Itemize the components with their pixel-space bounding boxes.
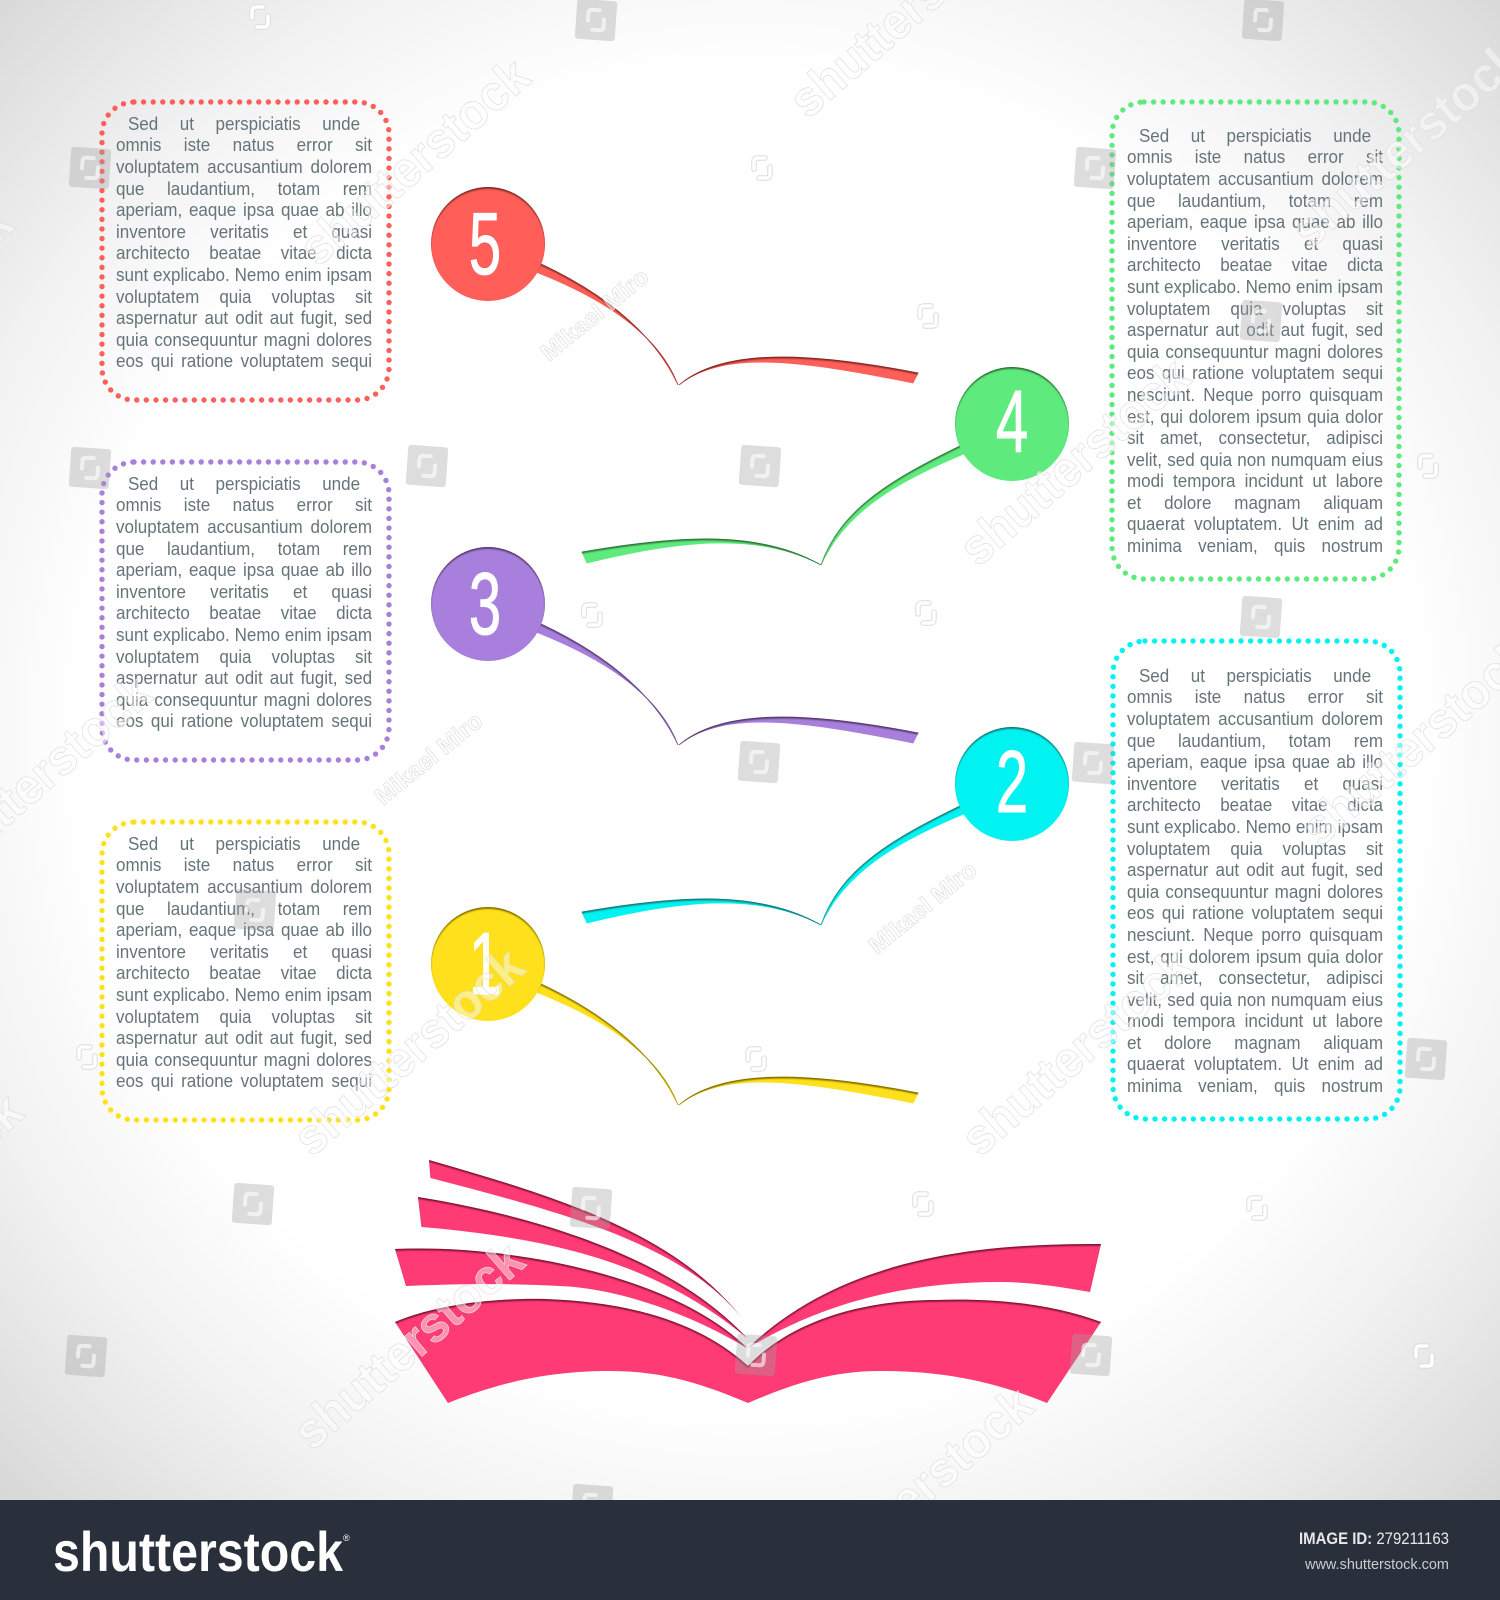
watermark overlay: Mikael Miro <box>864 856 982 960</box>
panel 4: green text box: Sed ut perspiciatis unde <box>1139 125 1371 146</box>
panel 4: green text box: velit, sed quia non numquam eius <box>1127 449 1383 470</box>
panel 2: cyan text box: eos qui ratione voluptatem sequi <box>1127 902 1383 923</box>
panel 4: green text box: que laudantium, totam rem <box>1127 190 1383 211</box>
panel 2: cyan text box: modi tempora incidunt ut labore <box>1127 1010 1383 1031</box>
panel 1: yellow text box <box>99 819 392 1123</box>
arrow: connector from badge 4 <box>582 445 966 565</box>
panel 4: green text box: sunt explicabo. Nemo enim ipsam <box>1127 276 1383 297</box>
panel 3: purple text box: inventore veritatis et quasi <box>116 581 372 602</box>
panel 5: red text box: voluptatem accusantium dolorem <box>116 156 372 177</box>
badge 3: 3 <box>469 555 501 653</box>
panel 3: purple text box: aperiam, eaque ipsa quae ab illo <box>116 559 372 580</box>
watermark overlay: Mikael Miro <box>370 707 488 811</box>
footer url: www.shutterstock.com <box>1304 1556 1449 1573</box>
panel 2: cyan text box: aperiam, eaque ipsa quae ab illo <box>1127 751 1383 772</box>
panel 4: green text box: inventore veritatis et quasi <box>1127 233 1383 254</box>
panel 5: red text box: voluptatem quia voluptas sit <box>116 286 372 307</box>
panel 3: purple text box <box>99 459 392 763</box>
panel 5: red text box: architecto beatae vitae dicta <box>116 242 372 263</box>
icon: open book <box>395 1160 1101 1403</box>
watermark overlay: Mikael Miro <box>536 263 654 367</box>
panel 4: green text box: voluptatem quia voluptas sit <box>1127 298 1383 319</box>
panel 3: purple text box: voluptatem accusantium dolorem <box>116 516 372 537</box>
panel 5: red text box: aperiam, eaque ipsa quae ab illo <box>116 199 372 220</box>
panel 4: green text box: est, qui dolorem ipsum quia dolor <box>1127 406 1383 427</box>
panel 2: cyan text box: Sed ut perspiciatis unde <box>1139 665 1371 686</box>
panel 4: green text box: aspernatur aut odit aut fugit, sed <box>1127 319 1383 340</box>
badge 5: 5 <box>469 195 501 293</box>
panel 4: green text box: voluptatem accusantium dolorem <box>1127 168 1383 189</box>
panel 1: yellow text box: architecto beatae vitae dicta <box>116 962 372 983</box>
panel 4: green text box: aperiam, eaque ipsa quae ab illo <box>1127 211 1383 232</box>
panel 2: cyan text box: est, qui dolorem ipsum quia dolor <box>1127 946 1383 967</box>
panel 2: cyan text box: quaerat voluptatem. Ut enim ad <box>1127 1053 1383 1074</box>
panel 1: yellow text box: aspernatur aut odit aut fugit, sed <box>116 1027 372 1048</box>
panel 3: purple text box: omnis iste natus error sit <box>116 494 372 515</box>
panel 1: yellow text box: sunt explicabo. Nemo enim ipsam <box>116 984 372 1005</box>
panel 4: green text box: sit amet, consectetur, adipisci <box>1127 427 1383 448</box>
panel 4: green text box: et dolore magnam aliquam <box>1127 492 1383 513</box>
watermark overlay: shutterstock <box>282 1231 534 1460</box>
badge 2: 2 <box>996 733 1028 831</box>
panel 5: red text box: eos qui ratione voluptatem sequi <box>116 350 372 371</box>
panel 2: cyan text box: inventore veritatis et quasi <box>1127 773 1383 794</box>
panel 4: green text box: omnis iste natus error sit <box>1127 146 1383 167</box>
panel 1: yellow text box: Sed ut perspiciatis unde <box>128 833 360 854</box>
panel 4: green text box: quaerat voluptatem. Ut enim ad <box>1127 513 1383 534</box>
panel 2: cyan text box: sit amet, consectetur, adipisci <box>1127 967 1383 988</box>
footer logo: ® <box>343 1533 350 1543</box>
panel 2: cyan text box: quia consequuntur magni dolores <box>1127 881 1383 902</box>
panel 1: yellow text box: quia consequuntur magni dolores <box>116 1049 372 1070</box>
arrow: connector from badge 2 <box>582 805 966 925</box>
arrow: connector from badge 3 <box>536 624 918 745</box>
badge 3 <box>431 547 545 661</box>
panel 4: green text box: nesciunt. Neque porro quisquam <box>1127 384 1383 405</box>
badge 1 <box>431 907 545 1021</box>
panel 4: green text box: eos qui ratione voluptatem sequi <box>1127 362 1383 383</box>
panel 3: purple text box: quia consequuntur magni dolores <box>116 689 372 710</box>
panel 2: cyan text box: que laudantium, totam rem <box>1127 730 1383 751</box>
panel 5: red text box: quia consequuntur magni dolores <box>116 329 372 350</box>
footer bar <box>0 1500 1500 1600</box>
panel 2: cyan text box: velit, sed quia non numquam eius <box>1127 989 1383 1010</box>
panel 3: purple text box: voluptatem quia voluptas sit <box>116 646 372 667</box>
panel 1: yellow text box: aperiam, eaque ipsa quae ab illo <box>116 919 372 940</box>
panel 5: red text box: aspernatur aut odit aut fugit, sed <box>116 307 372 328</box>
panel 2: cyan text box: aspernatur aut odit aut fugit, sed <box>1127 859 1383 880</box>
panel 2: cyan text box: nesciunt. Neque porro quisquam <box>1127 924 1383 945</box>
panel 5: red text box <box>99 99 392 403</box>
watermark overlay: shutterstock <box>948 347 1200 576</box>
panel 5: red text box: inventore veritatis et quasi <box>116 221 372 242</box>
panel 2: cyan text box: minima veniam, quis nostrum <box>1127 1075 1383 1096</box>
panel 5: red text box: Sed ut perspiciatis unde <box>128 113 360 134</box>
panel 2: cyan text box: voluptatem quia voluptas sit <box>1127 838 1383 859</box>
panel 4: green text box: modi tempora incidunt ut labore <box>1127 470 1383 491</box>
panel 2: cyan text box: architecto beatae vitae dicta <box>1127 794 1383 815</box>
watermark overlay: shutterstock <box>950 937 1202 1166</box>
badge 4 <box>955 367 1069 481</box>
panel 3: purple text box: que laudantium, totam rem <box>116 538 372 559</box>
watermark overlay: shutterstock <box>282 937 534 1166</box>
panel 3: purple text box: eos qui ratione voluptatem sequi <box>116 710 372 731</box>
panel 4: green text box: quia consequuntur magni dolores <box>1127 341 1383 362</box>
panel 1: yellow text box: inventore veritatis et quasi <box>116 941 372 962</box>
watermark overlay: shutterstock <box>791 1376 1043 1600</box>
panel 3: purple text box: aspernatur aut odit aut fugit, sed <box>116 667 372 688</box>
badge 1: 1 <box>469 915 501 1013</box>
footer logo: shutterstock <box>53 1520 344 1583</box>
badge 4: 4 <box>996 373 1028 471</box>
panel 2: cyan text box: et dolore magnam aliquam <box>1127 1032 1383 1053</box>
panel 1: yellow text box: omnis iste natus error sit <box>116 854 372 875</box>
panel 2: cyan text box: omnis iste natus error sit <box>1127 686 1383 707</box>
panel 5: red text box: sunt explicabo. Nemo enim ipsam <box>116 264 372 285</box>
panel 1: yellow text box: voluptatem quia voluptas sit <box>116 1006 372 1027</box>
panel 3: purple text box: Sed ut perspiciatis unde <box>128 473 360 494</box>
panel 4: green text box: minima veniam, quis nostrum <box>1127 535 1383 556</box>
panel 1: yellow text box: que laudantium, totam rem <box>116 898 372 919</box>
panel 5: red text box: omnis iste natus error sit <box>116 134 372 155</box>
watermark overlay: shutterstock <box>288 47 540 276</box>
panel 3: purple text box: architecto beatae vitae dicta <box>116 602 372 623</box>
panel 4: green text box: architecto beatae vitae dicta <box>1127 254 1383 275</box>
panel 2: cyan text box: sunt explicabo. Nemo enim ipsam <box>1127 816 1383 837</box>
panel 1: yellow text box: eos qui ratione voluptatem sequi <box>116 1070 372 1091</box>
badge 5 <box>431 187 545 301</box>
arrow: connector from badge 1 <box>536 984 918 1105</box>
panel 5: red text box: que laudantium, totam rem <box>116 178 372 199</box>
panel 4: green text box <box>1109 99 1402 582</box>
badge 2 <box>955 727 1069 841</box>
panel 1: yellow text box: voluptatem accusantium dolorem <box>116 876 372 897</box>
arrow: connector from badge 5 <box>536 264 918 385</box>
panel 3: purple text box: sunt explicabo. Nemo enim ipsam <box>116 624 372 645</box>
footer image id: IMAGE ID: 279211163 <box>1299 1530 1449 1548</box>
panel 2: cyan text box <box>1110 638 1403 1122</box>
panel 2: cyan text box: voluptatem accusantium dolorem <box>1127 708 1383 729</box>
